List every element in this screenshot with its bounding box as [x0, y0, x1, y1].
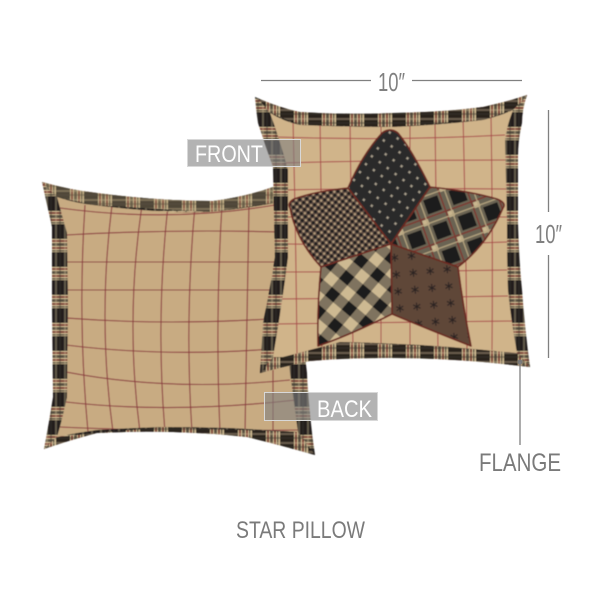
callout: flange: FLANGE — [479, 449, 561, 477]
label: BACK: BACK — [317, 396, 372, 423]
infographic: star pillow dimensions — [42, 72, 562, 538]
front pillow flange — [250, 90, 535, 376]
star patch: right plaid — [391, 187, 504, 267]
label: BACK — [264, 392, 378, 423]
panel: back pillow — [40, 180, 320, 462]
applique star — [289, 130, 504, 346]
caption: STAR PILLOW — [236, 517, 365, 544]
star patch: left small check — [289, 188, 391, 267]
dimension: height 10 inches: 10″ — [535, 219, 562, 249]
back pillow body with windowpane grid — [50, 190, 305, 440]
panel: front pillow — [250, 90, 535, 376]
star patch: bottom right brown stars — [391, 244, 471, 346]
dimension: width 10 inches: 10″ — [378, 67, 405, 97]
front pillow body with windowpane grid — [265, 105, 521, 361]
callout: flange — [479, 360, 561, 477]
star patch: top cross dots — [348, 130, 430, 244]
star patch: bottom left buffalo check — [318, 244, 392, 346]
back pillow flange — [40, 180, 320, 462]
label: FRONT: FRONT — [195, 141, 263, 168]
label: FRONT — [188, 140, 300, 168]
